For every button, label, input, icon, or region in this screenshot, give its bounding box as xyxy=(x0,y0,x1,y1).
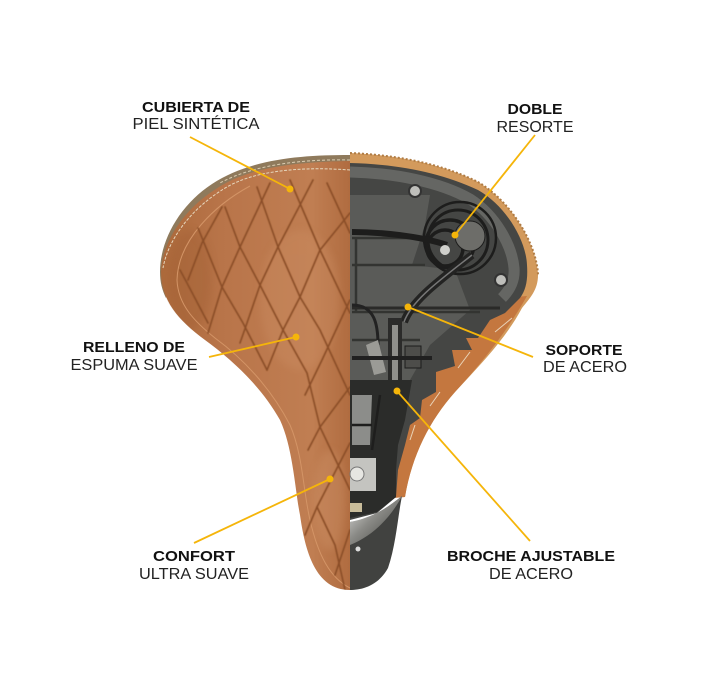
soft leather highlights xyxy=(166,269,344,546)
shell lighter ring xyxy=(350,172,514,298)
callout: broche ajustable de acero: BROCHE AJUSTABLE xyxy=(447,548,615,565)
callout: cubierta de piel sintetica: CUBIERTA DE xyxy=(142,99,250,116)
callout: doble resorte xyxy=(452,101,574,238)
callout: doble resorte: DOBLE xyxy=(508,101,562,118)
top rim of the leather cover xyxy=(160,155,350,298)
callout: broche ajustable de acero xyxy=(394,388,615,583)
callout: confort ultra suave: CONFORT xyxy=(153,548,235,565)
ribbed panel xyxy=(350,195,470,380)
callout: confort ultra suave xyxy=(139,476,334,583)
callout: cubierta de piel sintetica xyxy=(132,99,294,192)
callout: broche ajustable de acero: DE ACERO xyxy=(489,566,573,583)
callout: cubierta de piel sintetica: PIEL SINTÉTICA xyxy=(132,116,260,133)
torn orange leather xyxy=(394,296,527,498)
diamond quilting xyxy=(180,180,350,590)
stitching on torn leather xyxy=(410,318,512,440)
callout: confort ultra suave: ULTRA SUAVE xyxy=(139,566,249,583)
callout: relleno de espuma suave: ESPUMA SUAVE xyxy=(70,357,198,374)
dark shell with torn scalloped edge xyxy=(350,163,527,520)
panel: saddle left half, leather exterior xyxy=(160,155,350,590)
panel: saddle right half, underside xyxy=(350,153,538,590)
callout: relleno de espuma suave xyxy=(70,334,300,374)
double spring xyxy=(352,202,496,322)
woven outer rim xyxy=(350,153,538,500)
screws xyxy=(409,185,507,286)
inner seam xyxy=(177,186,350,588)
metal nose shield xyxy=(350,496,402,590)
white stitching along rim xyxy=(163,169,350,268)
infographic: bicycle saddle anatomy xyxy=(72,102,626,590)
callout: soporte de acero xyxy=(404,304,627,376)
steel support and clamp xyxy=(352,305,500,412)
callout: soporte de acero: DE ACERO xyxy=(543,359,627,376)
callout: doble resorte: RESORTE xyxy=(496,119,574,136)
leather surface xyxy=(161,161,350,590)
callout: soporte de acero: SOPORTE xyxy=(546,342,622,359)
lower frame xyxy=(350,380,412,518)
callout: relleno de espuma suave: RELLENO DE xyxy=(83,339,185,356)
